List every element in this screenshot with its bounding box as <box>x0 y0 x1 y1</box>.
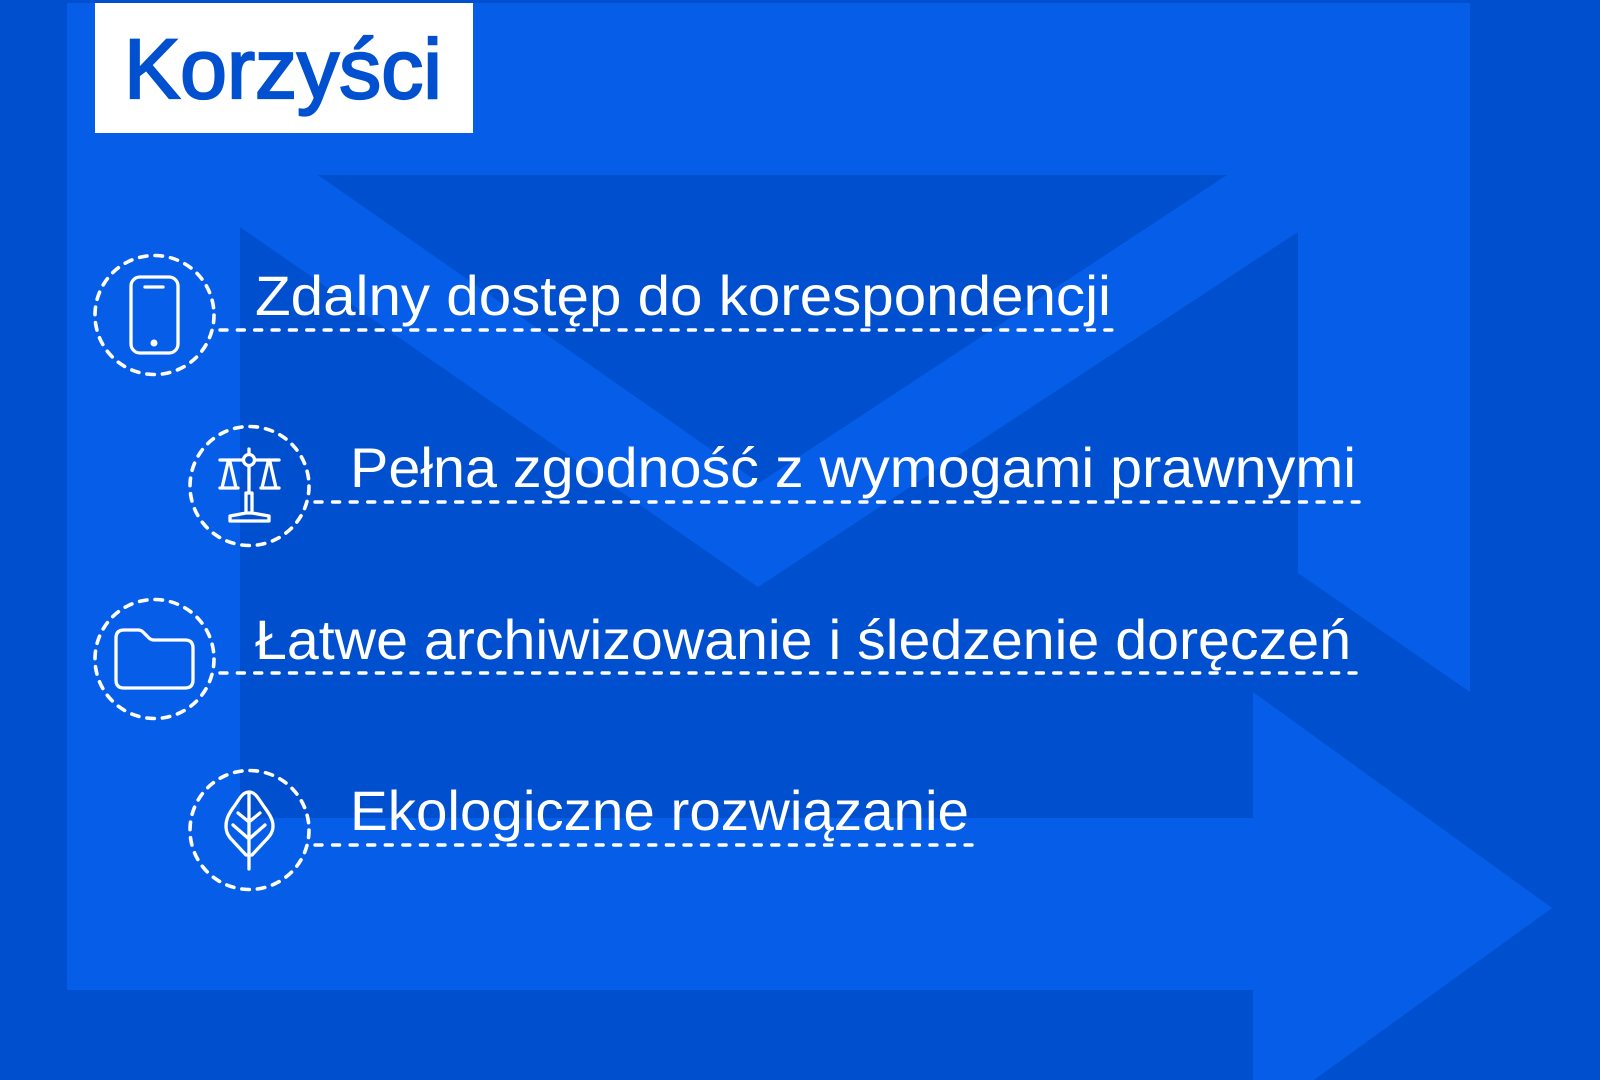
icon: scales <box>190 426 309 546</box>
title: Korzyści <box>124 22 442 116</box>
icon: phone <box>95 256 214 374</box>
title <box>95 3 473 133</box>
connector line <box>220 328 1112 332</box>
envelope flap <box>318 175 1227 483</box>
connector line <box>315 843 972 847</box>
connector line <box>315 500 1359 504</box>
benefit 1: remote access <box>95 256 1112 374</box>
benefit 2: legal compliance <box>190 426 1359 546</box>
label: Pełna zgodność z wymogami prawnymi <box>350 436 1356 499</box>
label: Łatwe archiwizowanie i śledzenie doręczeń <box>255 608 1351 671</box>
benefit 3: archiving and tracking <box>95 600 1356 718</box>
label: Ekologiczne rozwiązanie <box>350 779 969 842</box>
benefit 4: ecological solution <box>190 770 972 890</box>
label: Zdalny dostęp do korespondencji <box>255 264 1111 327</box>
icon: folder <box>95 600 214 718</box>
icon: leaf <box>190 770 309 890</box>
connector line <box>220 671 1356 675</box>
